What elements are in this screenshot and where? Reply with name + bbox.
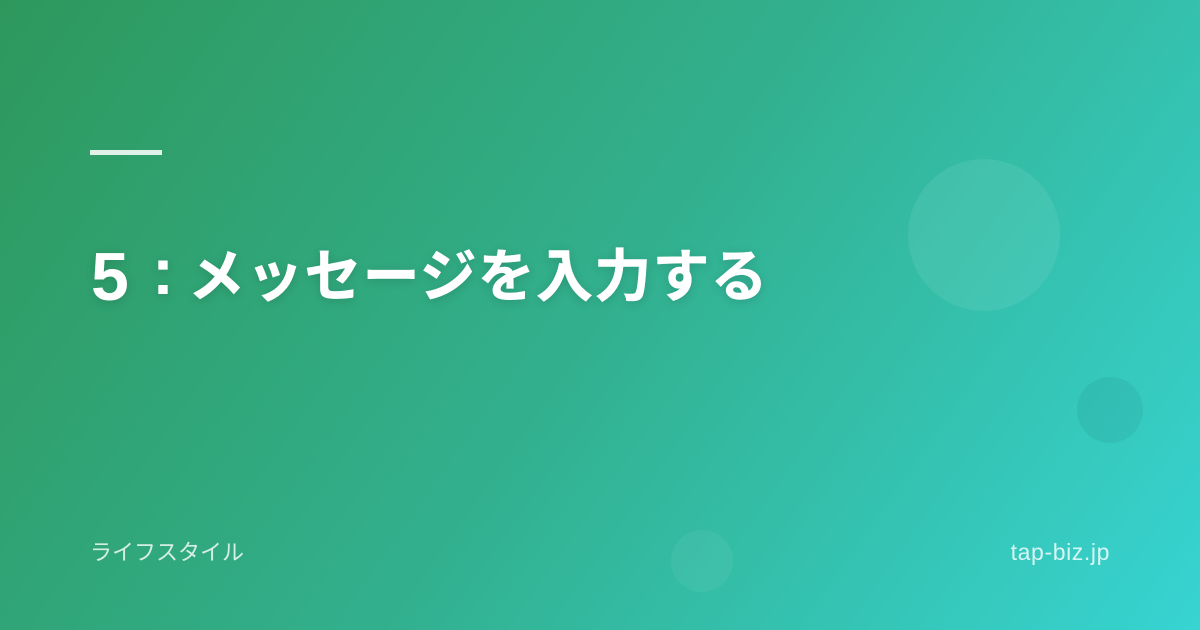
title (91, 234, 769, 315)
accent bar (90, 150, 162, 155)
title: メッセージを入力する (188, 245, 769, 309)
category label: ライフスタイル (90, 540, 244, 565)
decorative circle: bottom (671, 530, 733, 592)
decorative circle: large (908, 159, 1060, 311)
site domain: tap-biz.jp (1011, 539, 1110, 565)
decorative circle: small dark (1077, 377, 1143, 443)
title: 5 (91, 239, 129, 315)
title: : (152, 234, 174, 308)
